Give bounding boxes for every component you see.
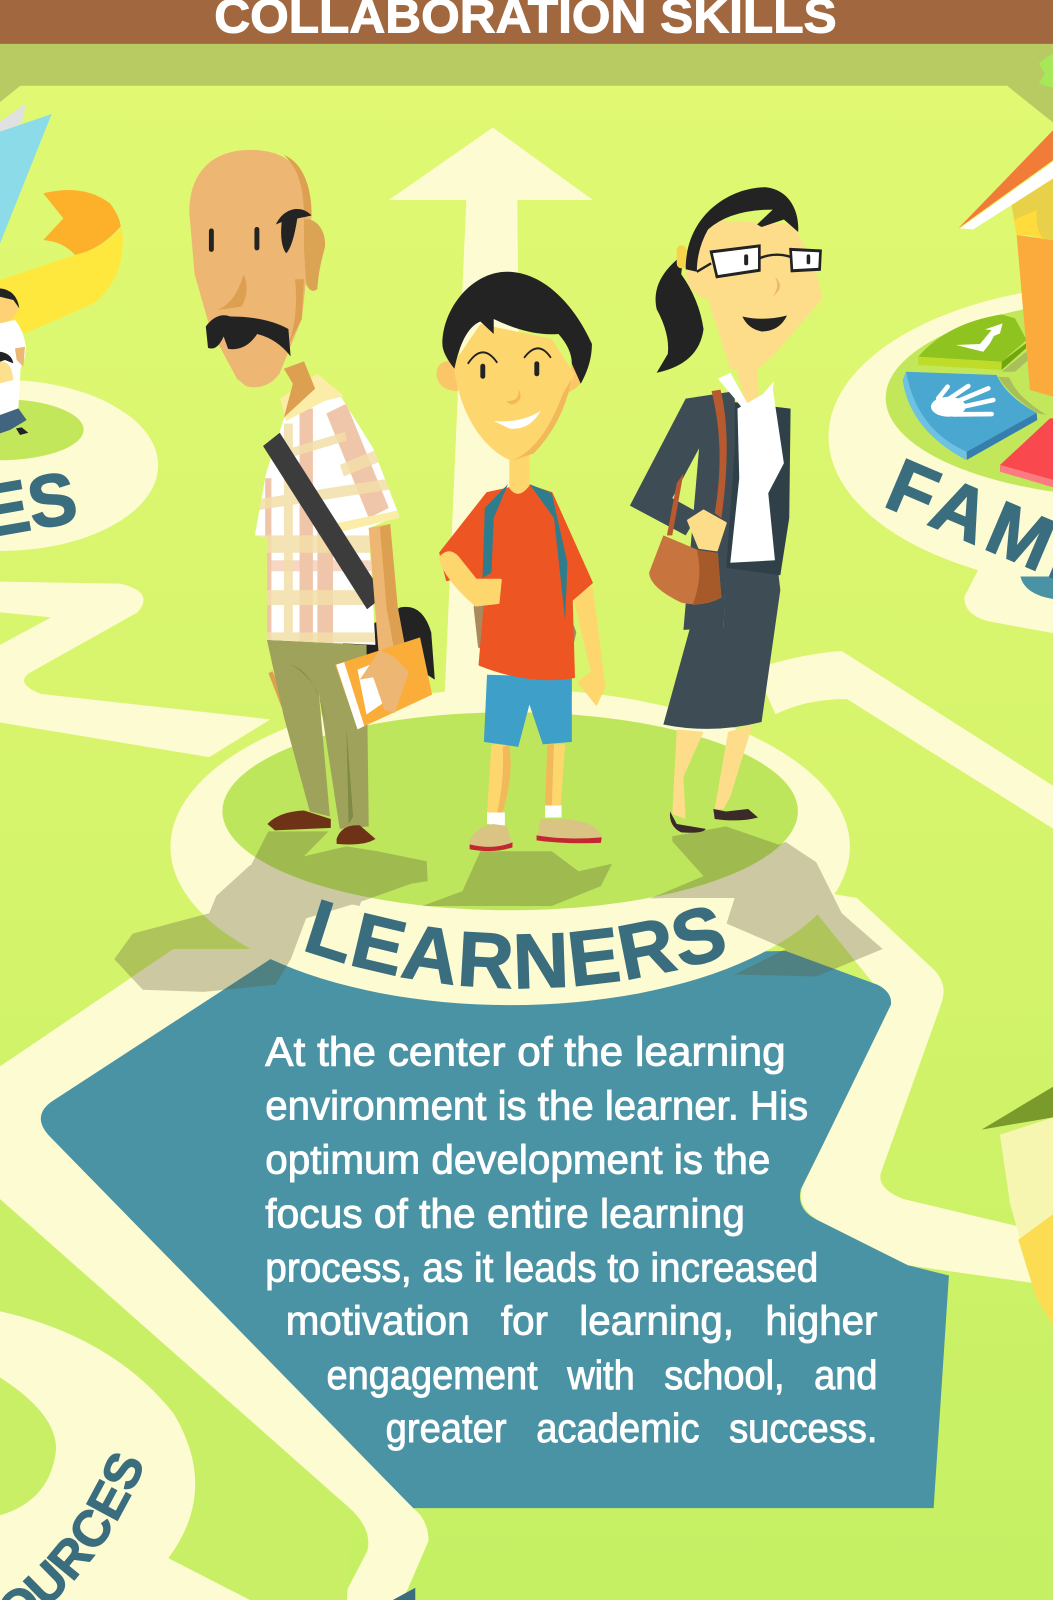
green wedge between band and ring	[0, 1200, 352, 1600]
house wall	[1017, 235, 1053, 397]
man arm	[361, 524, 410, 713]
arrow pointing up	[389, 128, 593, 714]
ribbon orange end	[43, 190, 121, 255]
character: woman	[630, 187, 822, 833]
path: upper right	[755, 651, 1053, 829]
scene: left station	[0, 103, 158, 554]
woman glasses	[697, 246, 820, 277]
trouser shading	[291, 665, 353, 824]
green piece shadow	[1002, 350, 1028, 372]
boy shirt	[440, 486, 592, 679]
bag strap	[667, 390, 727, 535]
plant icon	[956, 323, 1003, 352]
ring: left station	[0, 380, 158, 551]
path: band lower edge	[0, 1112, 413, 1510]
scene: family station	[829, 130, 1053, 635]
hand icon	[931, 386, 993, 417]
boy neck	[509, 453, 529, 494]
body text: motivation for learning, higher	[286, 1298, 878, 1344]
book pages	[0, 103, 26, 133]
man eyes	[209, 227, 259, 252]
body text: optimum development is the	[265, 1136, 770, 1182]
woman neck	[735, 364, 759, 414]
boy left arm	[440, 553, 500, 605]
small teal mark at bottom	[393, 1588, 415, 1600]
man trousers	[267, 640, 369, 829]
boy shoes	[469, 819, 602, 850]
man bag	[343, 607, 435, 680]
woman skirt	[663, 563, 780, 729]
resources ring body	[0, 1311, 250, 1600]
man collar	[280, 374, 344, 421]
man shirt	[255, 391, 399, 645]
learners ring	[170, 689, 850, 1005]
scene: right house fragment	[982, 1087, 1053, 1327]
character: boy	[437, 272, 604, 851]
woman mouth	[742, 316, 787, 331]
teal text panel	[41, 951, 949, 1508]
backpack	[474, 568, 576, 657]
green inside resources ring	[0, 1378, 56, 1515]
man head	[189, 150, 312, 387]
teal mark under family label	[1020, 577, 1053, 600]
body text: At the center of the learning	[265, 1028, 786, 1074]
boy head	[454, 324, 574, 461]
boy eyes	[480, 361, 539, 379]
path: lower left band	[0, 949, 429, 1600]
hair tie	[677, 245, 687, 268]
yellow wall	[1018, 1214, 1053, 1327]
characters	[189, 150, 822, 851]
body text: environment is the learner. His	[265, 1082, 808, 1128]
brown heading bar	[0, 0, 1053, 44]
man hand	[360, 650, 409, 713]
woman jacket	[630, 391, 735, 630]
man hair	[276, 209, 312, 253]
woman jacket back	[699, 399, 791, 575]
backpack straps	[483, 484, 567, 620]
boy hair	[442, 272, 592, 384]
cream paths	[0, 582, 1053, 1600]
olive wall band	[0, 43, 1053, 122]
boy jaw shading	[512, 379, 572, 461]
blue piece shadow	[998, 377, 1047, 415]
body text: greater academic success.	[386, 1405, 878, 1451]
man shoes	[267, 811, 375, 844]
inner circle: left station	[0, 399, 84, 460]
woman nose	[773, 277, 780, 297]
ribbon yellow	[0, 227, 123, 333]
woman hand	[688, 511, 726, 550]
roof	[982, 1087, 1053, 1130]
corner leaf	[1039, 53, 1053, 88]
boy socks	[487, 806, 562, 825]
house gable	[1012, 178, 1053, 240]
green piece	[918, 314, 1027, 370]
boy legs	[487, 744, 565, 812]
man back hand	[271, 672, 284, 707]
heading: learners arc: LEARNERS	[305, 899, 725, 989]
body text: process, as it leads to increased	[265, 1245, 818, 1291]
man moustache	[206, 315, 291, 356]
red piece	[1000, 418, 1053, 487]
path: upper left squiggle	[0, 582, 270, 757]
wall	[1000, 1117, 1053, 1250]
roof	[958, 130, 1053, 228]
woman legs	[672, 724, 753, 819]
boy smile	[494, 411, 541, 429]
path: lower right	[796, 888, 1053, 1286]
shoulder strap	[271, 439, 375, 603]
man neck	[284, 361, 315, 418]
blouse collar	[718, 373, 774, 419]
boy right arm	[574, 588, 604, 705]
blue piece	[903, 372, 1037, 460]
book cover	[0, 114, 52, 243]
head shading	[217, 155, 312, 354]
sleeve trim	[337, 511, 399, 532]
character: man	[189, 150, 435, 844]
woman handbag	[649, 535, 721, 605]
house gable highlight	[1014, 210, 1044, 239]
woman head	[686, 220, 822, 374]
ring: family	[829, 284, 1053, 590]
path stub below family ring	[964, 551, 1053, 635]
man ear	[304, 219, 325, 291]
child two	[0, 352, 28, 435]
boy shorts	[484, 675, 572, 747]
lower right path overlay	[801, 1005, 1053, 1286]
learners inner circle	[222, 712, 798, 910]
roof edge	[960, 162, 1053, 229]
ground shadows	[114, 826, 883, 992]
woman blouse	[730, 389, 784, 563]
body text	[265, 1028, 878, 1451]
inner circle: family	[886, 298, 1053, 498]
body text: focus of the entire learning	[265, 1191, 745, 1237]
body text: engagement with school, and	[327, 1352, 878, 1398]
woman hair	[686, 187, 798, 272]
boy eyebrows	[468, 348, 551, 364]
shirt plaid	[255, 404, 389, 643]
boy ears	[437, 361, 585, 394]
book	[335, 637, 432, 729]
woman ponytail	[656, 254, 704, 373]
woman shoes	[670, 809, 758, 833]
child one	[0, 288, 26, 383]
boy nose	[507, 389, 521, 405]
